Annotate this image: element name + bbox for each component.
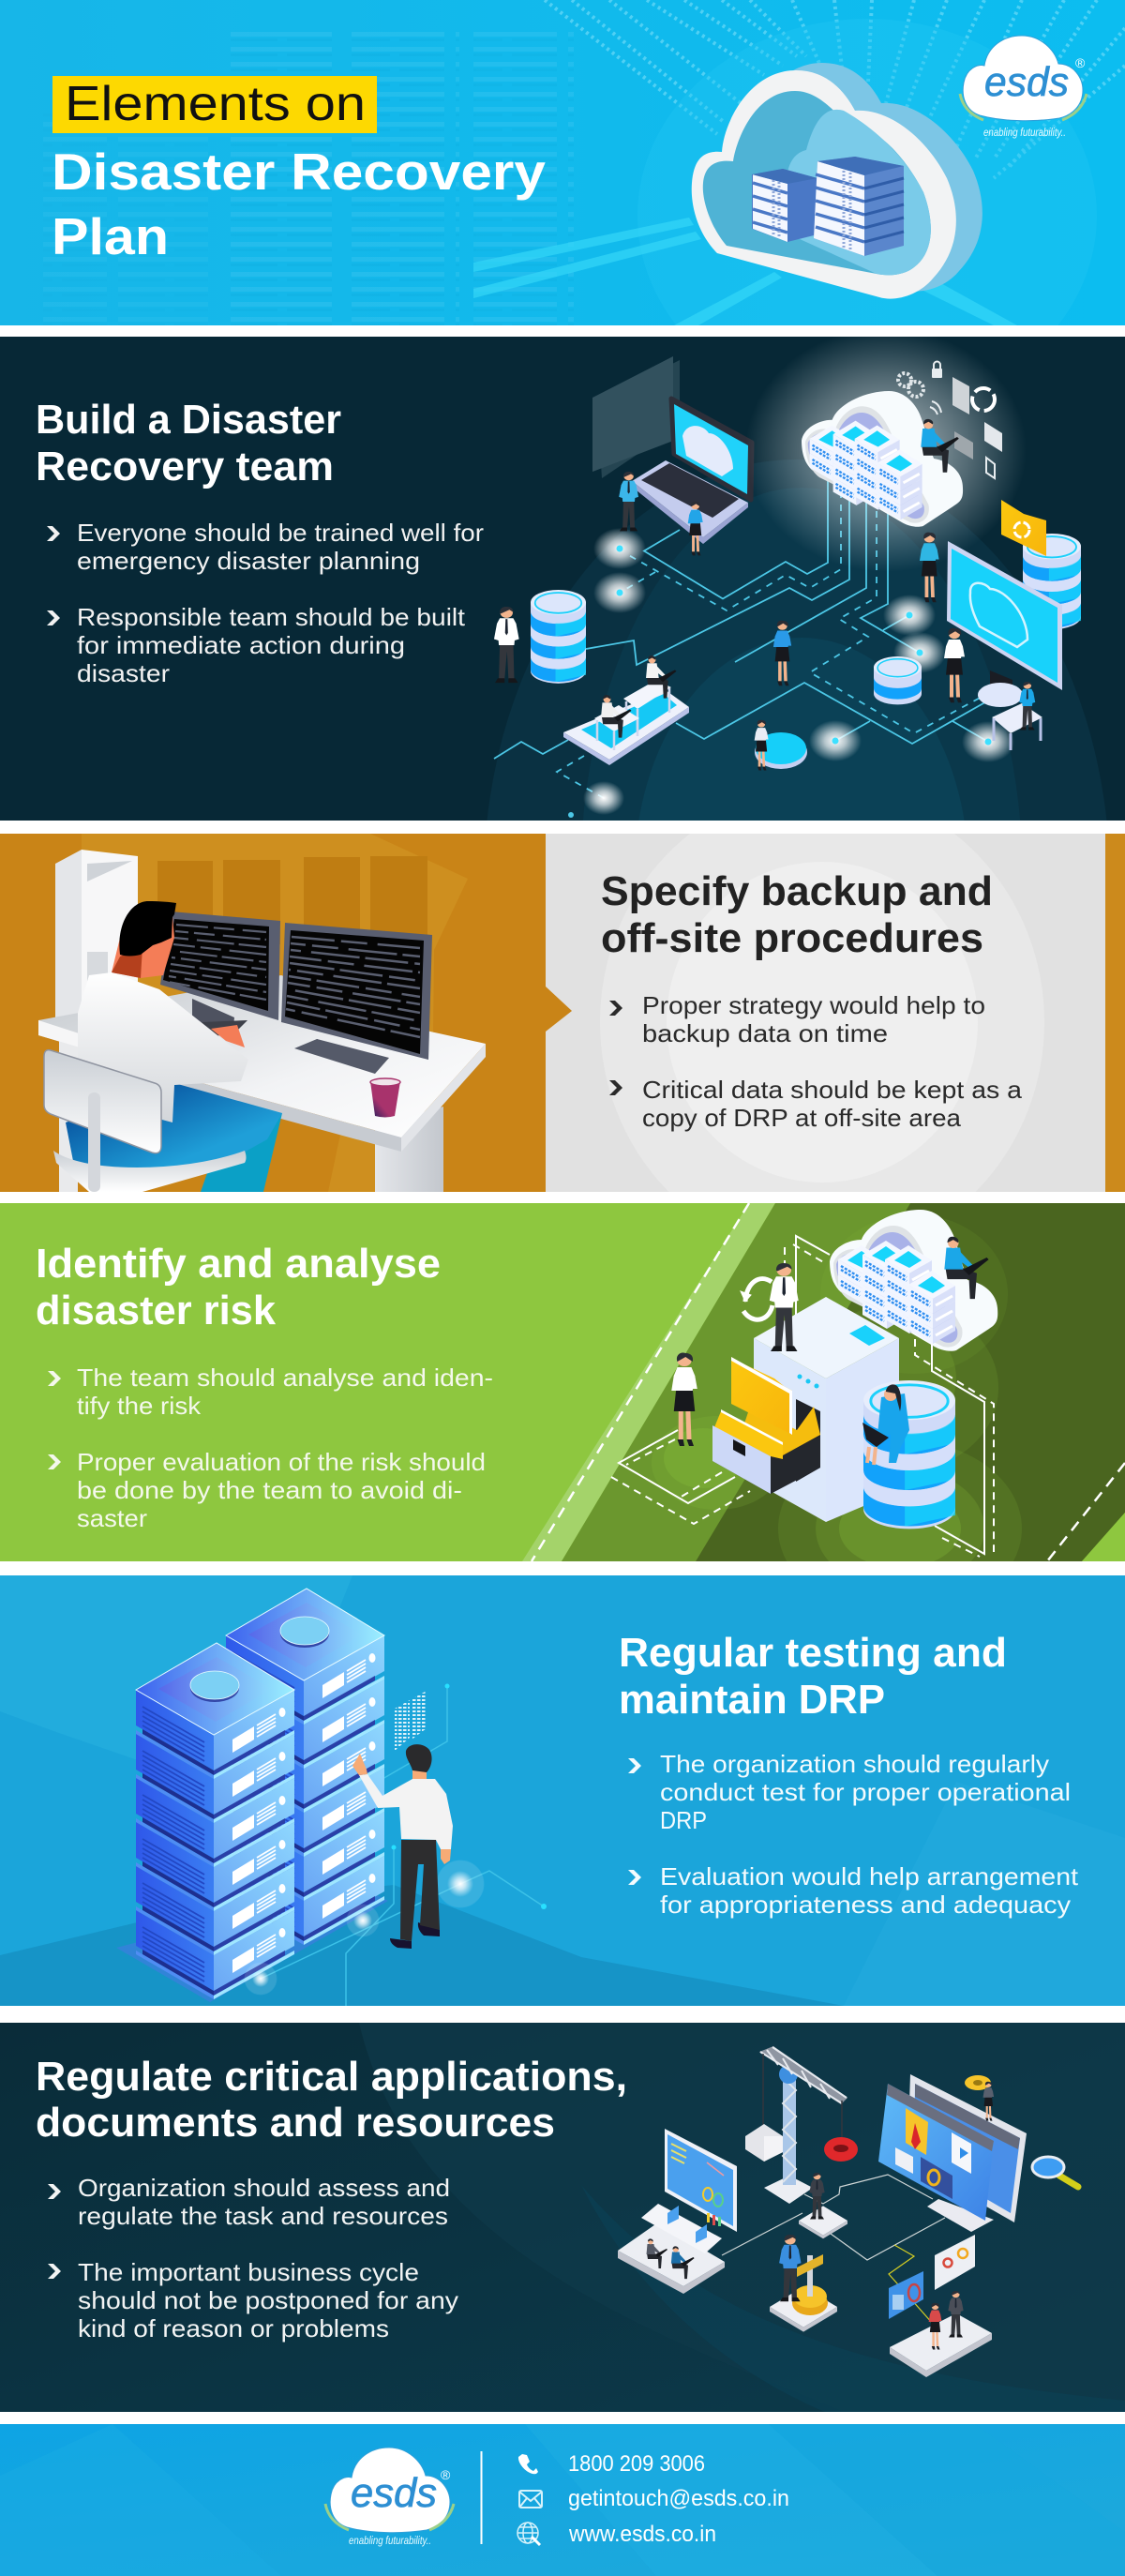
bullet: business cycle xyxy=(48,2258,458,2343)
logo: esds xyxy=(960,36,1087,139)
right monitor xyxy=(281,923,432,1074)
illustration: man at computer desk xyxy=(38,850,486,1192)
person: hand xyxy=(211,1025,245,1047)
logo: esds: ® xyxy=(1075,55,1086,70)
person: woman with folder xyxy=(671,1352,698,1446)
bullet: evaluation: Evaluation would help arrangement xyxy=(660,1862,1079,1891)
heading: Regular testing and xyxy=(619,1630,1007,1676)
heading: Recovery team xyxy=(36,444,334,490)
background: glowing floor lines xyxy=(473,218,1017,325)
bullet: assess xyxy=(48,2174,450,2230)
illustration: open drawer with folders xyxy=(712,1357,820,1494)
connection lines xyxy=(722,2175,945,2324)
heading: documents and resources xyxy=(36,2100,555,2146)
bullet: critical data: copy of DRP at off-site area xyxy=(642,1104,962,1132)
logo: esds: esds xyxy=(984,59,1069,105)
logo: esds xyxy=(325,2448,454,2547)
background: light glow circle xyxy=(638,19,1097,413)
bullet: evaluation xyxy=(628,1862,1079,1919)
bullet: analyse: The team should analyse and iden- xyxy=(77,1363,493,1392)
big cloud xyxy=(745,328,1027,572)
illustration: person on small platform xyxy=(799,2173,848,2238)
background: curved lighter area xyxy=(359,2023,1125,2412)
server stack right xyxy=(814,157,904,256)
illustration: rear server stack xyxy=(226,1589,384,1945)
contact: website: www.esds.co.in xyxy=(568,2522,716,2547)
illustration: application windows xyxy=(878,2074,1027,2232)
bullet: regular tests: The organization should regularly xyxy=(660,1750,1049,1778)
monitor xyxy=(947,541,1062,707)
illustration: chart cards and team xyxy=(889,2235,992,2377)
disc with seated person xyxy=(755,720,807,770)
contact: phone number: 1800 209 3006 xyxy=(568,2451,705,2477)
bullet: evaluation: be done by the team to avoid di- xyxy=(77,1476,462,1504)
icon: web globe xyxy=(518,2523,540,2545)
divider xyxy=(480,2451,482,2544)
icon: magnifying glass xyxy=(1032,2157,1078,2187)
bullet: responsible team: for immediate action during xyxy=(77,631,405,659)
man at desk xyxy=(992,682,1042,750)
node glows xyxy=(568,528,1014,818)
logo: esds: ® xyxy=(441,2467,451,2482)
illustration: construction crane xyxy=(745,2046,858,2204)
folder xyxy=(1001,500,1046,556)
panel: regular testing and maintain DRP xyxy=(0,1575,1125,2006)
heading: Regulate critical applications, xyxy=(36,2054,627,2100)
heading: Identify and analyse xyxy=(36,1241,441,1287)
background: binary data streams xyxy=(545,0,1125,178)
title: Elements on xyxy=(65,77,366,131)
title: Plan xyxy=(52,207,169,265)
icon: refresh arrows xyxy=(741,1279,772,1319)
bullet: responsible team xyxy=(47,603,466,687)
hologram code panels xyxy=(395,1691,427,1751)
network lines xyxy=(611,1236,994,1557)
glowing nodes xyxy=(245,1860,484,1995)
contact: email: getintouch@esds.co.in xyxy=(568,2486,789,2511)
background: light facets xyxy=(0,1575,1125,2006)
background: ground glow rings xyxy=(652,1214,1022,1618)
person: man touching server xyxy=(352,1744,453,1949)
bullet: business cycle: should not be postponed for any xyxy=(78,2286,458,2314)
bullet: responsible team: Responsible team should be built xyxy=(77,603,466,631)
heading xyxy=(36,397,341,490)
laptop xyxy=(632,399,752,544)
background: server racks xyxy=(43,28,574,325)
bullet: regular tests: conduct test for proper operational xyxy=(660,1778,1071,1806)
illustration: person with small gear on ladder xyxy=(965,2075,994,2121)
bullet: proper strategy: backup data on time xyxy=(642,1019,888,1047)
icon: phone xyxy=(518,2454,538,2474)
heading: Specify backup and xyxy=(601,868,993,914)
ghost code screens xyxy=(592,356,680,478)
panel: identify and analyse disaster risk xyxy=(0,1203,1125,1561)
bullet: proper strategy: Proper strategy would help to xyxy=(642,991,985,1019)
bullet: evaluation: Proper evaluation of the risk should xyxy=(77,1448,486,1476)
seated man on cloud xyxy=(921,419,959,473)
bullet: assess: Organization should assess and xyxy=(78,2174,450,2202)
title xyxy=(52,77,546,265)
panel: right grey text area xyxy=(546,788,1105,1257)
heading: maintain DRP xyxy=(619,1677,885,1723)
logo: esds: enabling futurability.. xyxy=(983,126,1066,139)
panel: header banner xyxy=(0,0,1125,325)
bullet: training: Everyone should be trained well for xyxy=(77,519,484,547)
illustration: cloud with servers xyxy=(830,1210,998,1351)
people xyxy=(619,472,638,531)
logo: esds: enabling futurability.. xyxy=(349,2534,431,2547)
left monitor xyxy=(160,911,280,1036)
heading xyxy=(36,2054,627,2146)
tower shelf xyxy=(55,850,138,1192)
illustration: front server stack xyxy=(136,1643,294,1999)
desk xyxy=(38,975,486,1192)
illustration: network of cloud, devices and people xyxy=(494,328,1081,818)
background: diagonal bands xyxy=(522,1203,1125,1561)
illustration: person turning giant gear xyxy=(770,2235,837,2332)
cup xyxy=(370,1078,400,1118)
chair back xyxy=(44,1050,161,1192)
panel: build a disaster recovery team xyxy=(0,337,1125,821)
heading xyxy=(601,868,993,961)
panel: regulate critical applications xyxy=(0,2023,1125,2412)
panel: specify backup and off-site procedures xyxy=(0,834,1125,1192)
heading xyxy=(619,1630,1007,1723)
bullet: training: emergency disaster planning xyxy=(77,547,420,575)
arrow pointer xyxy=(546,987,572,1032)
title: Disaster Recovery xyxy=(52,143,546,201)
heading: off-site procedures xyxy=(601,915,983,961)
background: faint office windows xyxy=(82,834,468,1192)
heading: disaster risk xyxy=(36,1288,277,1333)
illustration: cloud with servers xyxy=(692,63,982,299)
bullet: assess: regulate the task and resources xyxy=(78,2202,448,2230)
floor shadow xyxy=(116,1885,388,2002)
illustration: database with woman xyxy=(862,1380,955,1529)
bullet: critical data xyxy=(609,1076,1023,1132)
right edge strip xyxy=(1105,834,1125,1192)
chair seat xyxy=(53,1151,246,1192)
bullet: evaluation xyxy=(48,1448,486,1532)
heading: Build a Disaster xyxy=(36,397,341,443)
cloud service icons xyxy=(898,362,1002,478)
bullet: analyse: tify the risk xyxy=(77,1392,202,1420)
illustration: left control desk xyxy=(618,2129,737,2294)
bullet: training xyxy=(47,519,484,575)
person: trousers xyxy=(66,1083,282,1192)
phone with team xyxy=(563,655,689,765)
heading xyxy=(36,1241,441,1333)
bullet: regular tests xyxy=(628,1750,1071,1834)
bullet: evaluation: for appropriateness and adequacy xyxy=(660,1891,1071,1919)
bullet: business cycle: kind of reason or problems xyxy=(78,2314,389,2343)
panel: footer contact bar xyxy=(0,2424,1125,2576)
person: head and hair xyxy=(112,901,176,978)
illustration: filing cabinet xyxy=(754,1297,899,1522)
logo: esds: esds xyxy=(351,2470,437,2516)
databases xyxy=(531,590,586,684)
network lines xyxy=(494,479,990,798)
bullet: business cycle: The important business cycle xyxy=(78,2258,419,2286)
icon: mail xyxy=(519,2491,542,2508)
server stack left xyxy=(752,169,818,242)
person: man with clipboard xyxy=(770,1263,799,1351)
bullet: evaluation: saster xyxy=(77,1504,147,1532)
bullet: analyse xyxy=(48,1363,493,1420)
title highlight xyxy=(52,76,377,133)
person: shirt xyxy=(78,972,248,1122)
bullet: responsible team: disaster xyxy=(77,659,170,687)
bullet: critical data: Critical data should be kept as a xyxy=(642,1076,1023,1104)
circuit lines xyxy=(261,1686,544,2006)
bullet: regular tests: DRP xyxy=(660,1806,707,1834)
bullet: proper strategy xyxy=(609,991,985,1047)
